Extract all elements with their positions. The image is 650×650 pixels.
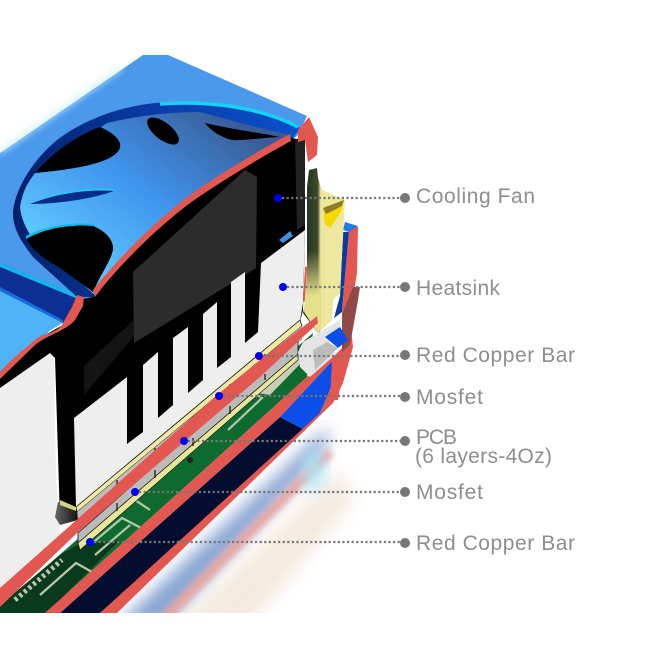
upper mosfet strip — [76, 320, 302, 512]
yellow knob — [323, 200, 344, 228]
fan slot openings — [26, 113, 280, 292]
red step at connector base — [300, 316, 318, 338]
label: Cooling Fan: Cooling Fan — [416, 185, 535, 208]
callout dots and leader lines — [86, 193, 410, 548]
label: Heatsink: Heatsink — [416, 277, 500, 300]
mosfet separators — [117, 354, 265, 511]
label: 6 layers: (6 layers-4Oz) — [415, 445, 552, 468]
label: Mosfet: Mosfet — [416, 386, 483, 409]
dark gray fan housing block — [133, 170, 257, 343]
yellow connector clip — [303, 168, 345, 333]
lower mosfet strip — [78, 340, 298, 543]
fan recess rim — [13, 102, 300, 297]
label: Mosfet lower: Mosfet — [416, 481, 483, 504]
reflection shadow on the floor — [117, 425, 355, 625]
PCB, mosfet and copper strips — [0, 320, 313, 613]
solder foot — [55, 502, 78, 525]
side casing — [342, 222, 358, 314]
label: Red Copper Bar lower: Red Copper Bar — [416, 532, 575, 555]
label: PCB: PCB — [416, 426, 457, 449]
red fan arc and lid section outline — [0, 117, 318, 379]
metal bracket — [298, 320, 340, 377]
red copper bars and lower case — [0, 316, 353, 613]
cooling fan — [13, 102, 300, 297]
lid lower step — [0, 263, 82, 372]
black interior of cooler — [0, 138, 305, 520]
heatsink — [0, 230, 305, 590]
right side connector and housing — [298, 168, 360, 400]
lid: blue top cover — [0, 55, 307, 378]
infographic: cooling module cutaway — [0, 55, 575, 613]
label: Red Copper Bar: Red Copper Bar — [416, 344, 575, 367]
green PCB — [0, 333, 313, 613]
rim highlight — [160, 103, 298, 127]
fan disc — [20, 112, 292, 295]
heatsink fins — [74, 230, 305, 507]
